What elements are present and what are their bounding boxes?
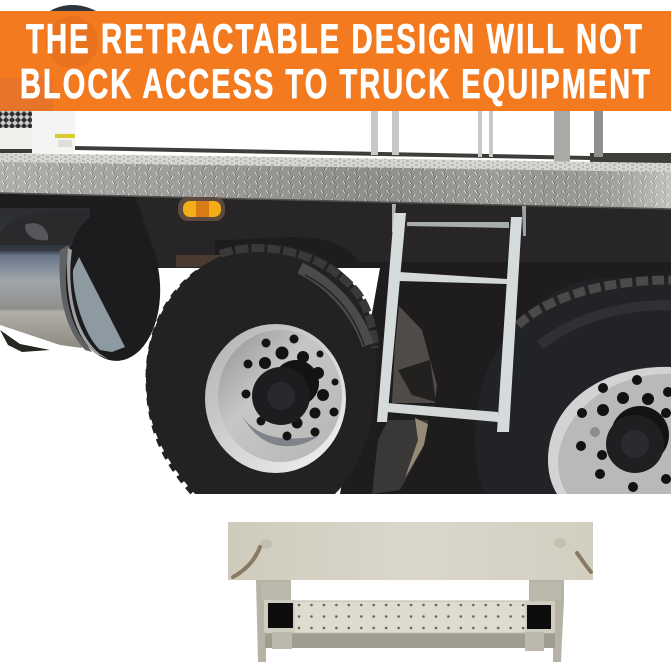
- wheel rim: [548, 367, 671, 494]
- hinge tabs: [261, 582, 561, 651]
- mounting plate: [228, 522, 593, 580]
- front wheel: [146, 245, 377, 494]
- truck photo: [0, 0, 671, 494]
- second wheel: [475, 278, 671, 494]
- retractable step product photo: [228, 522, 593, 662]
- locking pins: [233, 547, 591, 577]
- truck chassis: [0, 190, 671, 494]
- lower roller bar: [265, 632, 555, 648]
- fuel tank: [0, 206, 165, 364]
- diamond plate deck: [0, 153, 671, 209]
- right bracket: [529, 580, 564, 662]
- perforated step: [265, 600, 555, 634]
- rear dual tire: [345, 292, 437, 494]
- cab and railing background: [0, 0, 671, 167]
- hub: [252, 360, 319, 425]
- folding ladder: [377, 204, 526, 432]
- amber marker light: [178, 197, 225, 221]
- wheel rim: [205, 324, 346, 473]
- title text: [20, 15, 652, 107]
- square tube openings: [264, 600, 555, 632]
- orange title banner: [0, 5, 671, 111]
- left bracket: [256, 580, 291, 662]
